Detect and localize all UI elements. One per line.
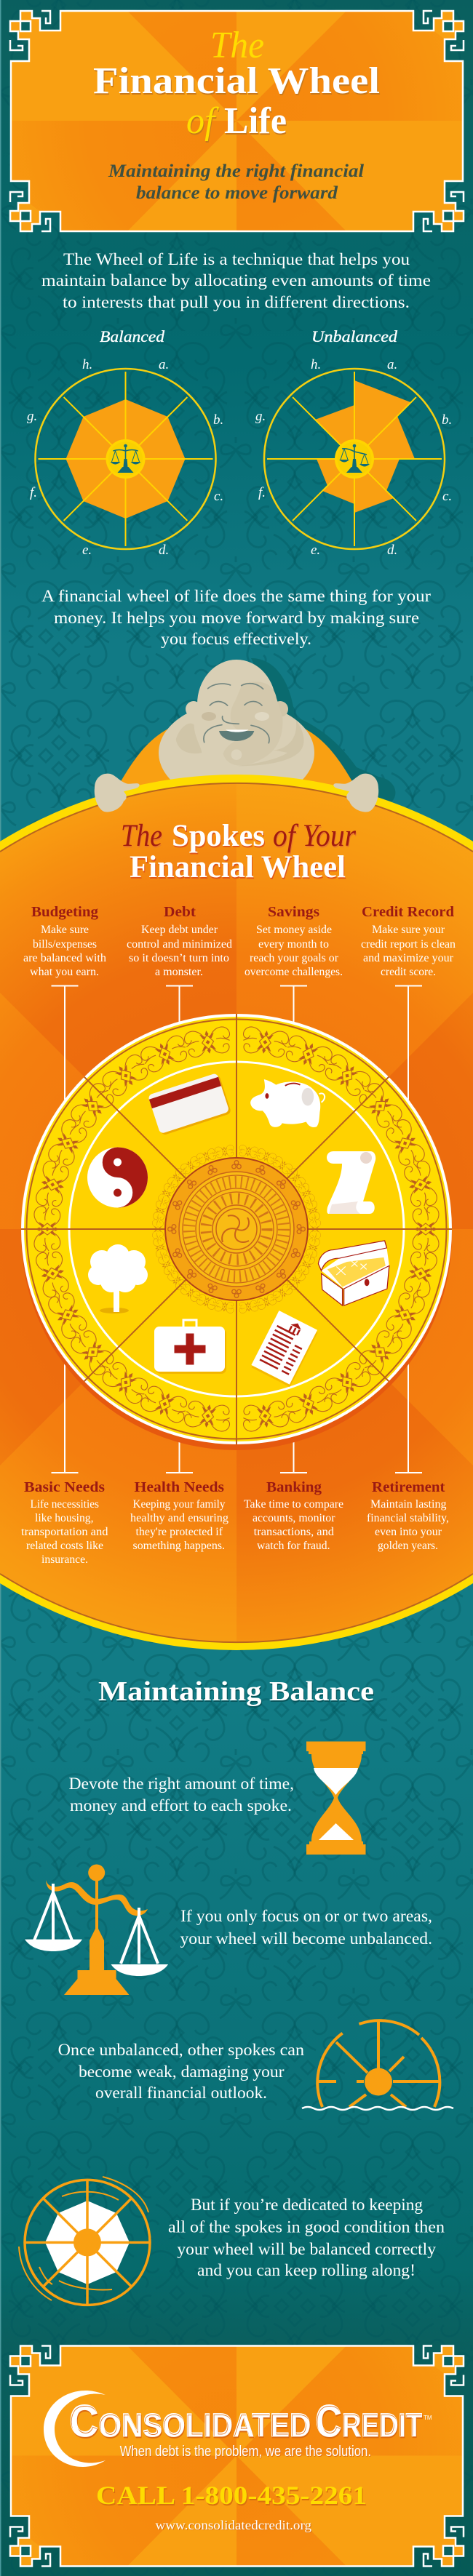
savings text: every month to [258, 938, 329, 951]
step 4 text [168, 2196, 445, 2279]
intro paragraph: maintain balance by allocating even amounts of time [41, 271, 431, 289]
banking text: Banking [266, 1479, 322, 1495]
main wheel [21, 1014, 452, 1444]
step 4 text: your wheel will be balanced correctly [177, 2240, 437, 2258]
second paragraph: you focus effectively. [161, 630, 311, 648]
retirement text [367, 1479, 449, 1552]
banking text [244, 1479, 343, 1552]
debt text: so it doesn’t turn into [129, 952, 229, 964]
unbalanced wheel: b. [442, 412, 452, 428]
credit record text: Make sure your [372, 924, 445, 936]
icon: piggy bank [250, 1079, 325, 1127]
banking text: transactions, and [254, 1526, 334, 1538]
step 3 text: become weak, damaging your [79, 2063, 285, 2081]
credit record text: Credit Record [362, 904, 454, 920]
savings text: Set money aside [256, 924, 332, 936]
second paragraph: money. It helps you move forward by making sure [54, 609, 419, 627]
spokes heading: Spokes [172, 819, 265, 853]
subtitle: balance to move forward [136, 183, 338, 203]
debt text: control and minimized [127, 938, 232, 951]
icon: tree [88, 1244, 148, 1313]
icon: broken wheel [302, 2020, 453, 2110]
unbalanced wheel: a. [387, 357, 397, 372]
health needs text: something happens. [132, 1540, 225, 1552]
unbalanced wheel: Unbalanced [311, 327, 398, 345]
icon: bank document [250, 1311, 319, 1387]
step 2 text: your wheel will become unbalanced. [180, 1929, 432, 1948]
icon: yin yang [87, 1148, 148, 1207]
unbalanced wheel: c. [442, 489, 452, 504]
title: Financial Wheel [93, 60, 380, 102]
balanced wheel: a. [159, 357, 169, 372]
step 2 text: If you only focus on or or two areas, [180, 1907, 432, 1925]
basic needs text: Basic Needs [24, 1479, 105, 1495]
credit record text: credit score. [381, 966, 436, 978]
step 3 text: Once unbalanced, other spokes can [58, 2041, 305, 2059]
step 1 text: money and effort to each spoke. [70, 1796, 292, 1815]
step 4 text: But if you’re dedicated to keeping [191, 2196, 424, 2214]
logo: CONSOLIDATED [69, 2396, 311, 2447]
budgeting text: Budgeting [31, 904, 98, 920]
balanced wheel: Balanced [100, 327, 165, 345]
intro paragraph: The Wheel of Life is a technique that helps you [63, 250, 410, 268]
savings text [245, 904, 343, 978]
inner ornament ring [152, 1145, 321, 1313]
hub [165, 1158, 308, 1300]
balanced wheel: b. [213, 412, 223, 428]
icon: treasure chest [318, 1241, 389, 1305]
health needs text: they're protected if [135, 1526, 223, 1538]
step 3 text [58, 2041, 305, 2102]
intro paragraph [41, 250, 431, 311]
basic needs text: insurance. [41, 1553, 88, 1566]
balanced wheel: h. [82, 357, 92, 372]
credit record text [361, 904, 456, 978]
basic needs text [21, 1479, 108, 1566]
step 1 text: Devote the right amount of time, [68, 1775, 294, 1793]
connectors [51, 986, 422, 1473]
basic needs text: related costs like [26, 1540, 103, 1552]
unbalanced wheel: e. [311, 543, 320, 558]
banking text: Take time to compare [244, 1498, 343, 1511]
retirement text: Maintain lasting [370, 1498, 447, 1511]
buddha figure [116, 660, 357, 804]
spokes heading: Financial Wheel [130, 850, 346, 884]
debt text: Keep debt under [141, 924, 218, 936]
icon: scroll [327, 1151, 375, 1214]
title [93, 25, 380, 142]
second paragraph [41, 587, 431, 648]
step 4 text: all of the spokes in good condition then [168, 2218, 445, 2236]
unbalanced wheel: f. [258, 485, 266, 500]
debt text: Debt [164, 904, 196, 920]
banking text: watch for fraud. [257, 1540, 330, 1552]
balanced wheel [27, 327, 223, 558]
title: The [210, 25, 264, 66]
logo: CREDIT [315, 2396, 422, 2447]
basic needs text: like housing, [35, 1512, 93, 1524]
debt text [127, 904, 232, 978]
icon: first aid kit [154, 1320, 226, 1374]
balanced wheel: c. [214, 489, 223, 504]
savings text: Savings [268, 904, 319, 920]
title: of [186, 100, 219, 142]
subtitle: Maintaining the right financial [108, 161, 364, 181]
basic needs text: transportation and [21, 1526, 108, 1538]
budgeting text [23, 904, 106, 978]
balanced wheel: e. [82, 543, 92, 558]
wheel spokes [21, 1014, 452, 1444]
unbalanced wheel: d. [387, 543, 397, 558]
budgeting text: are balanced with [23, 952, 106, 964]
retirement text: golden years. [378, 1540, 438, 1552]
health needs text [130, 1479, 228, 1552]
logo: TM [424, 2415, 432, 2421]
savings text: reach your goals or [250, 952, 339, 964]
budgeting text: what you earn. [30, 966, 99, 978]
icon: tilted scales [25, 1865, 168, 1995]
budgeting text: Make sure [41, 924, 89, 936]
step 4 text: and you can keep rolling along! [197, 2261, 416, 2279]
spokes heading [121, 819, 356, 884]
footer banner [10, 2346, 464, 2566]
icon: balanced wheel [19, 2177, 151, 2305]
spokes heading: The [121, 819, 162, 853]
retirement text: financial stability, [367, 1512, 449, 1524]
balanced wheel: f. [30, 485, 37, 500]
credit record text: and maximize your [363, 952, 454, 964]
ornament band [34, 1025, 439, 1433]
basic needs text: Life necessities [31, 1498, 99, 1511]
spokes panel [0, 775, 473, 1650]
wheel shadow [21, 1020, 452, 1450]
logo [44, 2391, 432, 2467]
retirement text: even into your [375, 1526, 442, 1538]
health needs text: Keeping your family [132, 1498, 226, 1511]
banking text: accounts, monitor [253, 1512, 335, 1524]
credit record text: credit report is clean [361, 938, 456, 951]
unbalanced wheel [255, 327, 452, 558]
step 3 text: overall financial outlook. [95, 2084, 267, 2102]
logo: When debt is the problem, we are the solution. [120, 2444, 371, 2460]
maintaining balance heading: Maintaining Balance [98, 1676, 374, 1707]
unbalanced wheel: g. [255, 409, 266, 424]
website: www.consolidatedcredit.org [156, 2518, 311, 2532]
phone number: CALL 1-800-435-2261 [96, 2481, 367, 2510]
subtitle [108, 161, 364, 203]
spokes heading: of Your [273, 819, 356, 853]
header banner [10, 11, 464, 231]
health needs text: Health Needs [134, 1479, 224, 1495]
icon: credit card [148, 1072, 231, 1136]
balanced wheel: g. [27, 409, 37, 424]
step 2 text [180, 1907, 432, 1948]
savings text: overcome challenges. [245, 966, 343, 978]
retirement text: Retirement [372, 1479, 445, 1495]
balanced wheel: d. [159, 543, 169, 558]
icon: hourglass [306, 1741, 365, 1855]
budgeting text: bills/expenses [33, 938, 97, 951]
title: Life [224, 100, 287, 142]
debt text: a monster. [155, 966, 203, 978]
intro paragraph: to interests that pull you in different directions. [63, 293, 410, 311]
rays [0, 784, 473, 1642]
buddha hands [95, 774, 378, 812]
unbalanced wheel: h. [311, 357, 321, 372]
second paragraph: A financial wheel of life does the same thing for your [41, 587, 431, 605]
buddha shadow [251, 658, 395, 804]
step 1 text [68, 1775, 294, 1815]
health needs text: healthy and ensuring [130, 1512, 228, 1524]
